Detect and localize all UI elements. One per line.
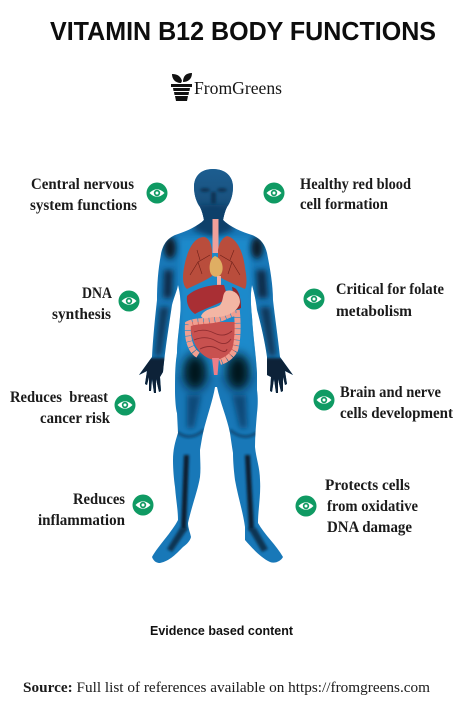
icon: eye bbox=[296, 496, 316, 516]
lung veins bbox=[190, 250, 240, 275]
callout: breast cancer risk bbox=[10, 389, 136, 427]
right lung bbox=[218, 236, 246, 289]
spleen bbox=[232, 287, 241, 310]
source line: Source: Full list of references available on https://fromgreens.com bbox=[23, 680, 430, 696]
label text: metabolism bbox=[336, 303, 412, 320]
label text bbox=[336, 281, 444, 320]
icon: eye bbox=[118, 290, 140, 312]
icon: plant pot bbox=[171, 73, 192, 101]
icon: eye bbox=[304, 288, 324, 310]
groin shadows bbox=[183, 354, 207, 390]
callout: oxidative DNA damage bbox=[296, 477, 418, 536]
hands bbox=[139, 356, 164, 393]
label text bbox=[10, 389, 110, 427]
icon: eye bbox=[314, 390, 334, 410]
label text: Reduces breast bbox=[10, 389, 109, 406]
callout: folate metabolism bbox=[304, 281, 444, 320]
rectum bbox=[212, 358, 219, 375]
large intestine bbox=[188, 313, 238, 362]
heart bbox=[210, 256, 223, 277]
label text: synthesis bbox=[52, 306, 111, 323]
liver bbox=[187, 285, 228, 314]
shoulder shadows bbox=[164, 237, 176, 259]
small intestine folds bbox=[194, 330, 232, 352]
label text: cells development bbox=[340, 405, 454, 422]
label text: Brain and nerve bbox=[340, 384, 441, 401]
label text: from oxidative bbox=[327, 498, 418, 515]
torso highlight bbox=[176, 238, 256, 375]
label text: system functions bbox=[30, 197, 137, 214]
icon: eye bbox=[114, 394, 136, 416]
label text bbox=[30, 176, 137, 214]
stomach bbox=[201, 291, 240, 318]
icon: eye bbox=[264, 182, 284, 204]
callout: healthy red blood bbox=[264, 176, 411, 213]
knee shading bbox=[177, 430, 204, 437]
evidence note: Evidence based content bbox=[150, 624, 294, 638]
label text: Protects cells bbox=[325, 477, 410, 494]
label text: Healthy red blood bbox=[300, 176, 411, 193]
label text bbox=[38, 491, 125, 529]
esophagus bbox=[217, 276, 221, 290]
human body figure bbox=[139, 169, 293, 563]
label text: Reduces bbox=[73, 491, 125, 508]
label text: cell formation bbox=[300, 196, 388, 213]
foot shading bbox=[167, 528, 188, 552]
icon: eye bbox=[146, 182, 168, 204]
callout: central nervous system bbox=[30, 176, 168, 214]
logo wordmark: FromGreens bbox=[194, 78, 282, 98]
neck and shoulder shadow bbox=[193, 205, 234, 238]
label text: inflammation bbox=[38, 512, 125, 529]
icon: eye bbox=[132, 494, 154, 516]
label text: Critical for folate bbox=[336, 281, 444, 298]
label text bbox=[300, 176, 411, 213]
trachea bbox=[212, 219, 218, 253]
label text: DNA damage bbox=[327, 519, 412, 536]
callout: brain and nerve cells bbox=[314, 384, 454, 422]
title: VITAMIN B12 BODY FUNCTIONS bbox=[50, 18, 436, 46]
logo: FromGreens bbox=[171, 73, 282, 101]
face features bbox=[200, 187, 228, 204]
arm shadows bbox=[163, 270, 173, 298]
left lung bbox=[183, 237, 212, 289]
label text: Central nervous bbox=[31, 176, 134, 193]
label text: cancer risk bbox=[40, 410, 110, 427]
label text bbox=[340, 384, 454, 422]
thigh shading bbox=[187, 395, 201, 428]
label text bbox=[52, 285, 113, 323]
small intestine bbox=[190, 322, 236, 360]
label text: DNA bbox=[82, 285, 113, 302]
callout: inflammation bbox=[38, 491, 154, 529]
callout: DNA synthesis bbox=[52, 285, 140, 323]
shin shadows bbox=[181, 455, 189, 530]
head shading bbox=[194, 169, 233, 221]
label text bbox=[325, 477, 418, 536]
body silhouette bbox=[139, 169, 293, 563]
